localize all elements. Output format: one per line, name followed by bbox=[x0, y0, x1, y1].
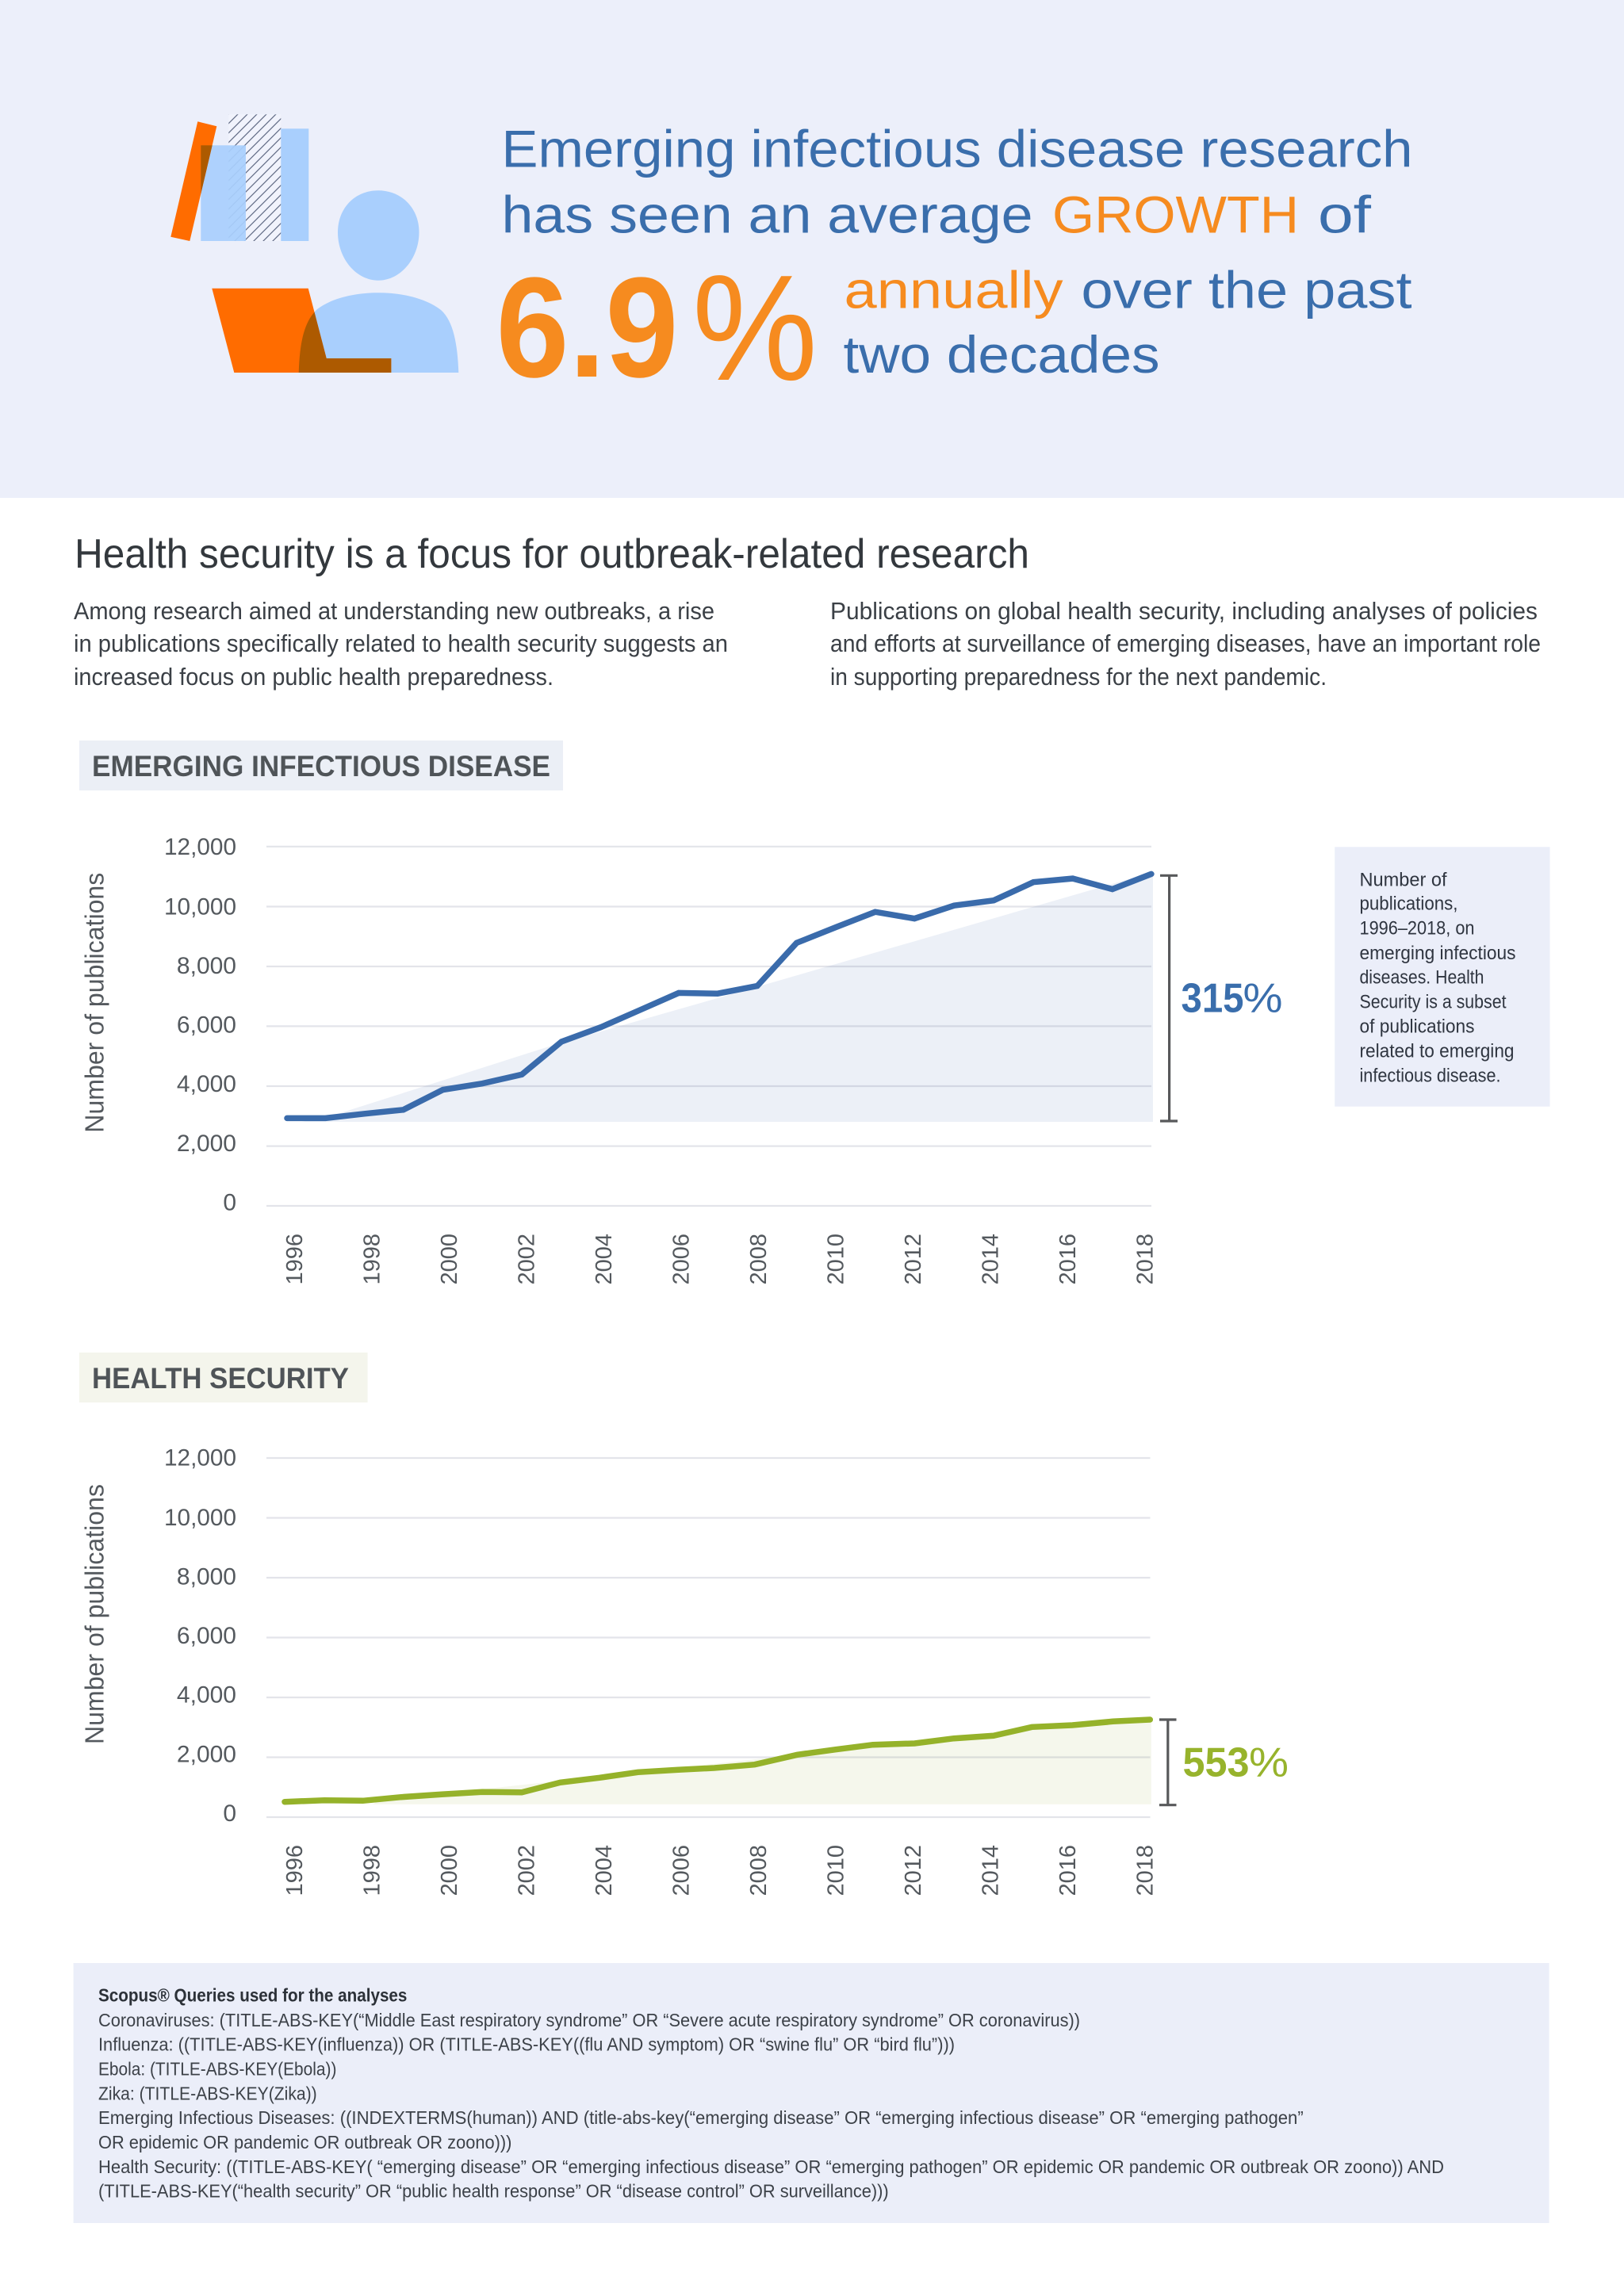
x axis labels: 2006 bbox=[668, 1845, 694, 1896]
x axis labels: 2000 bbox=[437, 1845, 462, 1896]
x axis labels: 2014 bbox=[978, 1845, 1003, 1896]
growth label: 553% bbox=[1183, 1740, 1289, 1786]
intro text: right column: Publications on global health security, including analyses of policies bbox=[830, 597, 1538, 625]
headline: has seen an average bbox=[501, 185, 1032, 243]
x axis labels: 2018 bbox=[1132, 1845, 1158, 1896]
y axis labels bbox=[164, 1445, 236, 1827]
y axis labels: 12,000 bbox=[164, 1445, 236, 1471]
bracket bbox=[1160, 875, 1178, 1121]
intro text: left column: in publications specifically related to health security suggests an bbox=[74, 629, 728, 657]
y axis labels: 10,000 bbox=[164, 894, 236, 920]
x axis labels: 2006 bbox=[668, 1234, 694, 1285]
icon: person body bbox=[299, 293, 458, 373]
queries list bbox=[98, 2010, 1444, 2202]
note box: diseases. Health bbox=[1359, 967, 1484, 989]
y axis labels: 6,000 bbox=[177, 1012, 236, 1039]
x axis labels: 2002 bbox=[514, 1845, 539, 1896]
chart heading: emerging infectious disease: EMERGING INFECTIOUS DISEASE bbox=[92, 750, 550, 783]
x axis labels: 1996 bbox=[282, 1234, 308, 1285]
x axis labels: 2014 bbox=[978, 1234, 1003, 1285]
x axis labels: 1998 bbox=[359, 1845, 385, 1896]
intro text: right column: and efforts at surveillance of emerging diseases, have an important role bbox=[830, 629, 1541, 657]
x axis labels: 2016 bbox=[1055, 1234, 1081, 1285]
growth label: 315% bbox=[1182, 976, 1283, 1022]
note box: related to emerging bbox=[1359, 1040, 1515, 1062]
x axis labels: 1998 bbox=[359, 1234, 385, 1285]
y axis labels: 2,000 bbox=[177, 1131, 236, 1157]
intro text: right column bbox=[830, 597, 1541, 691]
big stat: 6.9%: 6.9 bbox=[496, 248, 679, 408]
section heading: Health security is a focus for outbreak-related research bbox=[75, 531, 1029, 577]
intro text: right column: in supporting preparedness for the next pandemic. bbox=[830, 663, 1327, 691]
header panel bbox=[0, 0, 1624, 498]
growth label: 553%: 553 bbox=[1183, 1740, 1250, 1786]
y axis title: Number of publications bbox=[79, 1484, 109, 1744]
chart heading: health security: HEALTH SECURITY bbox=[92, 1362, 349, 1395]
queries list: (TITLE-ABS-KEY(“health security” OR “public health response” OR “disease control” OR surveillance))) bbox=[98, 2181, 889, 2202]
queries list: OR epidemic OR pandemic OR outbreak OR zoono))) bbox=[98, 2132, 511, 2152]
headline: of bbox=[1318, 185, 1372, 243]
queries heading: Scopus® Queries used for the analyses bbox=[98, 1984, 407, 2005]
note box: Security is a subset bbox=[1359, 992, 1507, 1013]
intro text: left column: Among research aimed at understanding new outbreaks, a rise bbox=[74, 597, 714, 625]
y axis labels: 8,000 bbox=[177, 1563, 236, 1590]
queries list: Emerging Infectious Diseases: ((INDEXTERMS(human)) AND (title-abs-key(“emerging disease” OR “emerging infectious disease” OR “emerging pathogen” bbox=[98, 2107, 1304, 2128]
x axis labels: 2004 bbox=[592, 1845, 617, 1896]
bracket bbox=[1159, 1720, 1177, 1805]
line chart: health security bbox=[79, 1445, 1289, 1896]
note box: 1996–2018, on bbox=[1359, 918, 1475, 939]
queries list: Zika: (TITLE-ABS-KEY(Zika)) bbox=[98, 2083, 317, 2103]
growth label: 553%: % bbox=[1249, 1740, 1289, 1786]
y axis labels: 6,000 bbox=[177, 1623, 236, 1649]
icon: blue book bbox=[201, 145, 246, 241]
note box: publications, bbox=[1359, 894, 1457, 915]
x axis labels: 1996 bbox=[282, 1845, 308, 1896]
x axis labels: 2002 bbox=[514, 1234, 539, 1285]
icon: hatched book bbox=[228, 114, 281, 241]
icon: researcher with books and laptop bbox=[170, 114, 458, 373]
note box bbox=[1335, 847, 1549, 1107]
headline: GROWTH bbox=[1052, 185, 1299, 243]
headline: two decades bbox=[844, 325, 1159, 384]
x axis labels: 2010 bbox=[823, 1845, 848, 1896]
icon: leaning orange book bbox=[170, 121, 217, 241]
note box: of publications bbox=[1359, 1016, 1475, 1038]
y axis labels: 4,000 bbox=[177, 1071, 236, 1097]
icon: laptop bbox=[212, 289, 392, 373]
y axis labels: 8,000 bbox=[177, 953, 236, 979]
headline: Emerging infectious disease research bbox=[501, 120, 1413, 178]
chart heading: health security bbox=[79, 1353, 368, 1402]
growth label: 315%: 315 bbox=[1182, 976, 1243, 1022]
icon: person head bbox=[338, 190, 419, 281]
y axis labels: 4,000 bbox=[177, 1682, 236, 1709]
queries list: Health Security: ((TITLE-ABS-KEY( “emerging disease” OR “emerging infectious disease” OR “emerging pathogen” OR epidemic OR pandemic OR outbreak OR zoono)) AND bbox=[98, 2156, 1444, 2177]
y axis title: Number of publications bbox=[79, 873, 109, 1133]
chart heading: emerging infectious disease bbox=[79, 740, 563, 790]
x axis labels: 2004 bbox=[592, 1234, 617, 1285]
note box: infectious disease. bbox=[1359, 1065, 1500, 1086]
note box: emerging infectious bbox=[1359, 943, 1516, 964]
panel: scopus queries bbox=[74, 1963, 1549, 2223]
headline: annually bbox=[844, 260, 1063, 319]
y axis labels: 10,000 bbox=[164, 1505, 236, 1531]
queries list: Ebola: (TITLE-ABS-KEY(Ebola)) bbox=[98, 2058, 336, 2079]
line chart: emerging infectious disease bbox=[79, 834, 1282, 1285]
x axis labels bbox=[282, 1234, 1158, 1285]
big stat: 6.9% bbox=[496, 244, 818, 412]
x axis labels: 2012 bbox=[901, 1234, 926, 1285]
y axis labels: 0 bbox=[223, 1189, 236, 1215]
note box: Number of bbox=[1359, 869, 1447, 890]
headline: over the past bbox=[1082, 260, 1411, 319]
x axis labels: 2008 bbox=[746, 1845, 772, 1896]
big stat: 6.9%: % bbox=[692, 244, 818, 412]
x axis labels bbox=[282, 1845, 1158, 1896]
y axis labels: 12,000 bbox=[164, 834, 236, 860]
x axis labels: 2018 bbox=[1132, 1234, 1158, 1285]
data line bbox=[285, 1720, 1150, 1802]
x axis labels: 2000 bbox=[437, 1234, 462, 1285]
headline bbox=[501, 120, 1413, 384]
queries list: Coronaviruses: (TITLE-ABS-KEY(“Middle East respiratory syndrome” OR “Severe acute respiratory syndrome” OR coronavirus)) bbox=[98, 2010, 1080, 2030]
queries list: Influenza: ((TITLE-ABS-KEY(influenza)) OR (TITLE-ABS-KEY((flu AND symptom) OR “swine flu” OR “bird flu”))) bbox=[98, 2034, 955, 2055]
y axis labels: 0 bbox=[223, 1800, 236, 1827]
y axis labels bbox=[164, 834, 236, 1215]
intro text: left column: increased focus on public health preparedness. bbox=[74, 663, 553, 691]
intro text: left column bbox=[74, 597, 728, 691]
icon: tall blue book bbox=[281, 128, 308, 241]
x axis labels: 2010 bbox=[823, 1234, 848, 1285]
y axis labels: 2,000 bbox=[177, 1741, 236, 1767]
x axis labels: 2008 bbox=[746, 1234, 772, 1285]
x axis labels: 2012 bbox=[901, 1845, 926, 1896]
x axis labels: 2016 bbox=[1055, 1845, 1081, 1896]
data line bbox=[287, 874, 1151, 1118]
growth label: 315%: % bbox=[1243, 976, 1283, 1022]
